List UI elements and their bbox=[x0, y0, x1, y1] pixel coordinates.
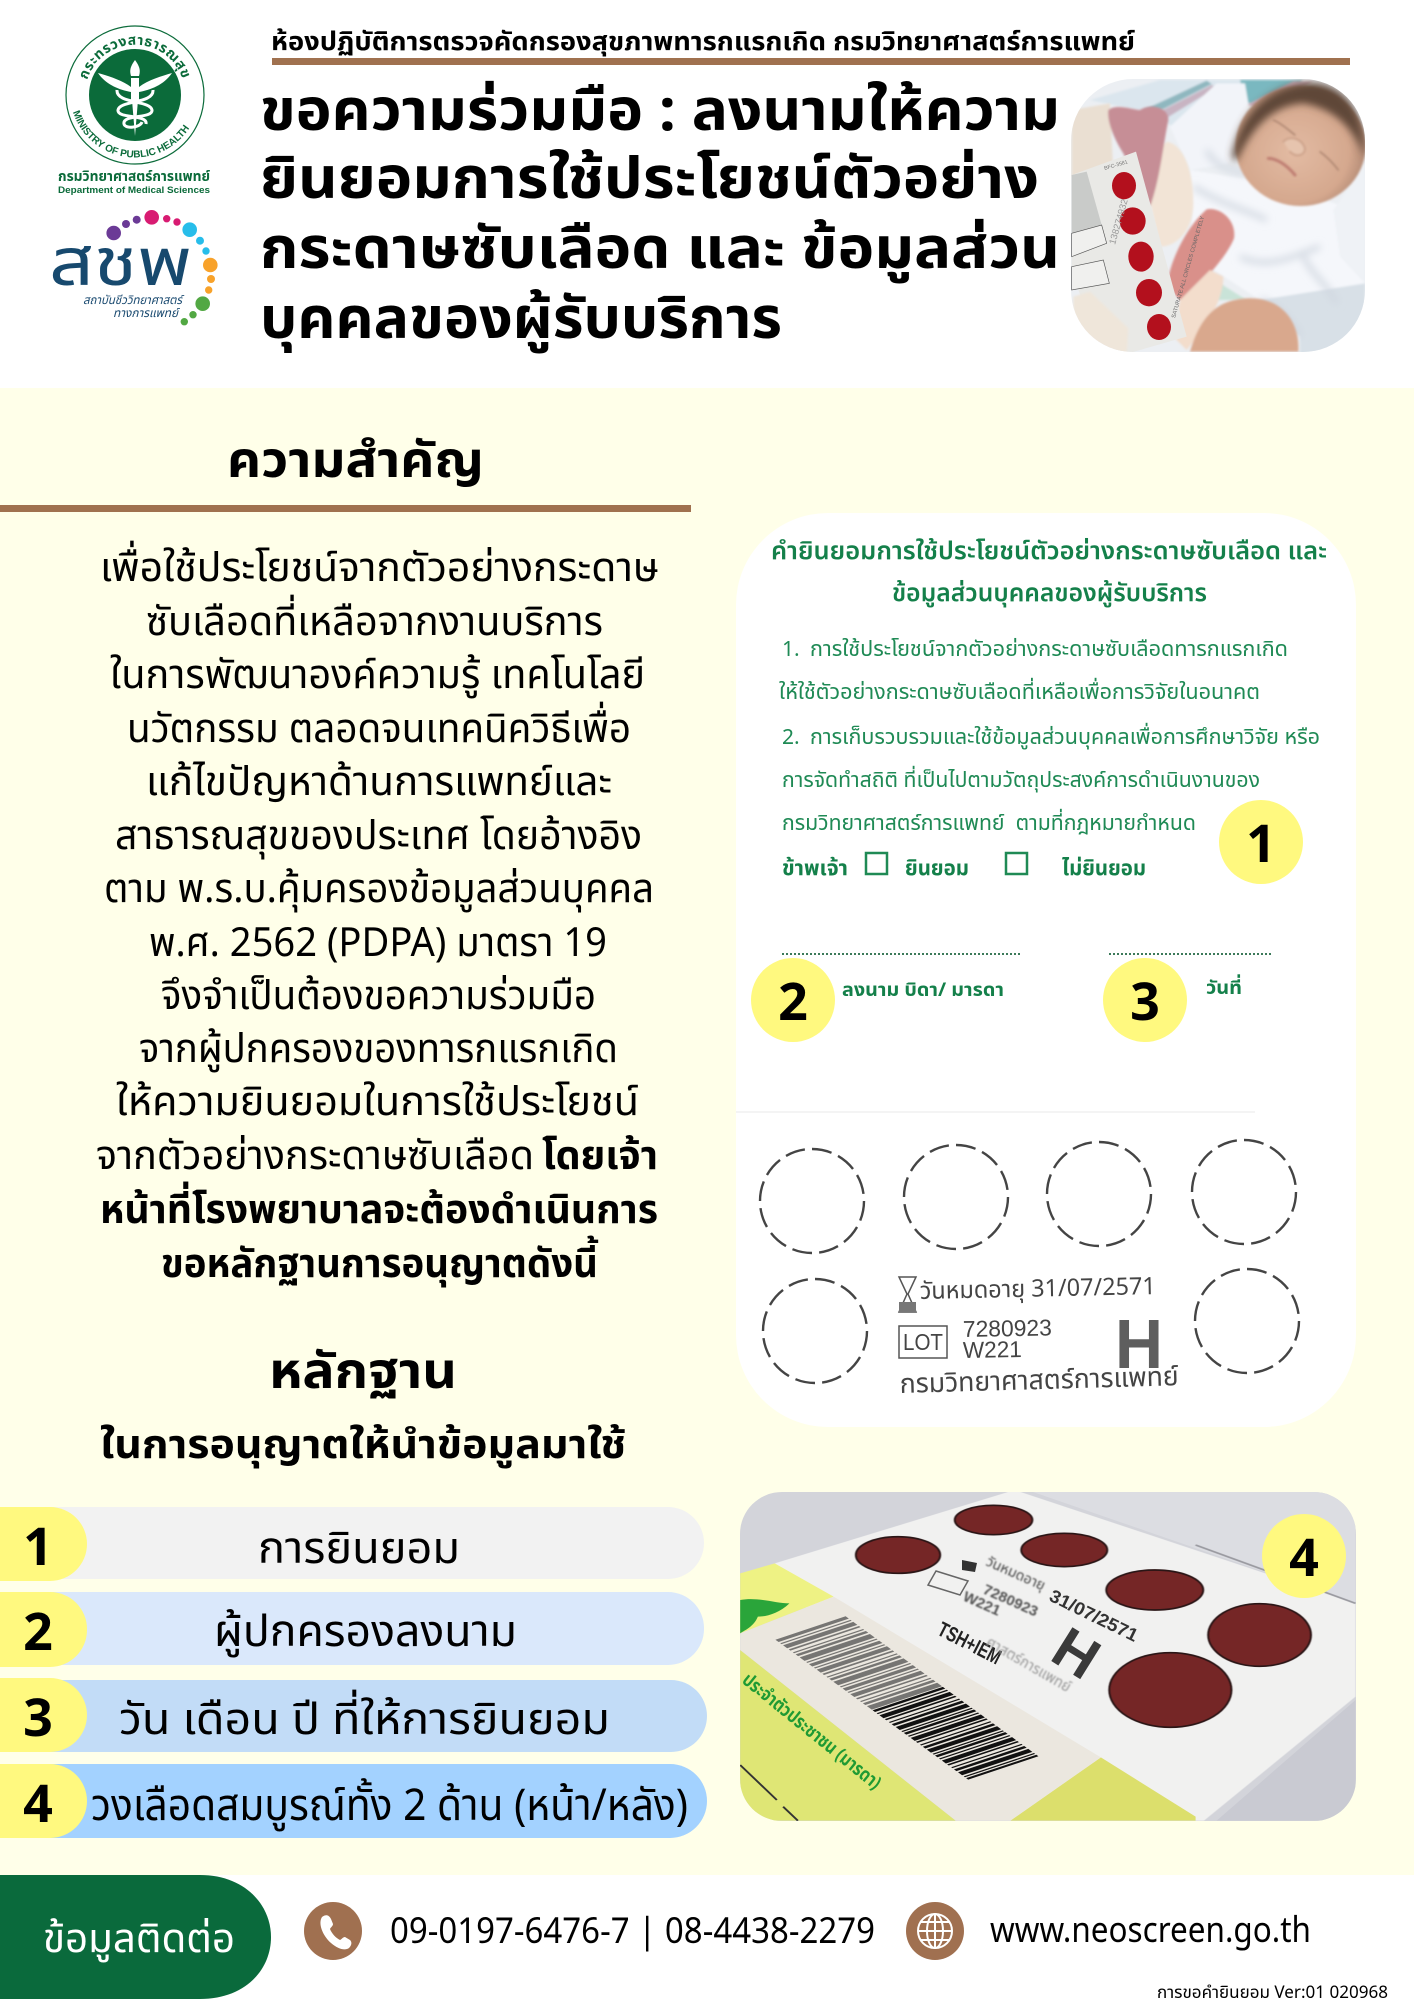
logo: Ministry of Public Health: MINISTRY OF PUBLIC HEALTH bbox=[73, 110, 190, 158]
badge 2: 2 bbox=[778, 966, 808, 1044]
form title: คำยินยอมการใช้ประโยชน์ตัวอย่างกระดาษซับเลือด และ bbox=[771, 533, 1327, 571]
consent checkboxes: ไม่ยินยอม bbox=[1062, 854, 1146, 885]
list item 1: 1 bbox=[23, 1511, 53, 1589]
logo: institute of biological sciences: ทางการแพทย์ bbox=[113, 305, 180, 323]
phone numbers: 09-0197-6476-7 | 08-4438-2279 bbox=[390, 1906, 875, 1960]
title: กระดาษซับเลือด และ ข้อมูลส่วน bbox=[260, 207, 1060, 295]
title: ยินยอมการใช้ประโยชน์ตัวอย่าง bbox=[260, 137, 1039, 225]
form clauses: ให้ใช้ตัวอย่างกระดาษซับเลือดที่เหลือเพื่อการวิจัยในอนาคต bbox=[779, 677, 1260, 709]
card print: TSH+IEM bbox=[934, 1618, 1005, 1669]
body text block: จากตัวอย่างกระดาษซับเลือด bbox=[96, 1127, 534, 1187]
list item 1: การยินยอม bbox=[258, 1516, 460, 1583]
consent checkboxes bbox=[782, 853, 1146, 885]
body text block: จากผู้ปกครองของทารกแรกเกิด bbox=[139, 1020, 618, 1080]
body text block: โดยเจ้า bbox=[542, 1127, 658, 1187]
lot number: LOT bbox=[903, 1329, 943, 1355]
page background bbox=[0, 388, 1414, 1875]
badge 3 bbox=[1103, 958, 1187, 1044]
photo: newborn heel-prick blood spot card: SATURATE ALL CIRCLES COMPLETELY bbox=[1171, 215, 1206, 319]
card print: W221 bbox=[960, 1588, 1003, 1620]
card small print: BFC-3581 bbox=[1104, 159, 1129, 172]
fold line bbox=[736, 1111, 1255, 1113]
list item 3: 3 bbox=[23, 1682, 53, 1760]
form department name: กรมวิทยาศาสตร์การแพทย์ bbox=[899, 1357, 1179, 1406]
list item 3 bbox=[0, 1678, 707, 1760]
expiry date: วันหมดอายุ 31/07/2571 bbox=[919, 1269, 1156, 1310]
photo: newborn heel-prick blood spot card bbox=[1070, 78, 1367, 353]
card print: ศาสตร์การแพทย์ bbox=[982, 1631, 1075, 1699]
form clauses: กรมวิทยาศาสตร์การแพทย์ ตามที่กฎหมายกำหนด bbox=[782, 808, 1196, 840]
photo: newborn heel-prick blood spot card: 138274932 bbox=[1107, 198, 1130, 246]
logo: institute of biological sciences bbox=[49, 210, 218, 325]
list item 2 bbox=[0, 1592, 704, 1674]
list item 4: วงเลือดสมบูรณ์ทั้ง 2 ด้าน (หน้า/หลัง) bbox=[91, 1773, 688, 1840]
icon: globe bbox=[906, 1902, 964, 1960]
dashed blood spot circles bbox=[760, 1140, 1299, 1383]
department name Thai: กรมวิทยาศาสตร์การแพทย์ bbox=[58, 167, 210, 188]
body text block: นวัตกรรม ตลอดจนเทคนิควิธีเพื่อ bbox=[127, 700, 631, 760]
logo: Ministry of Public Health: กระทรวงสาธารณสุข bbox=[80, 36, 190, 80]
heading: importance: ความสำคัญ bbox=[227, 424, 484, 500]
card print: H bbox=[1041, 1615, 1111, 1692]
body text block: หน้าที่โรงพยาบาลจะต้องดำเนินการ bbox=[100, 1181, 658, 1241]
panel: consent form bbox=[736, 513, 1356, 1427]
heading: evidence: หลักฐาน bbox=[269, 1335, 457, 1411]
card print bbox=[735, 1552, 1141, 1797]
title: ขอความร่วมมือ : ลงนามให้ความ bbox=[260, 69, 1060, 157]
icon: phone bbox=[304, 1902, 362, 1960]
body text block: ในการพัฒนาองค์ความรู้ เทคโนโลยี bbox=[110, 646, 645, 706]
body text block: เพื่อใช้ประโยชน์จากตัวอย่างกระดาษ bbox=[100, 539, 659, 599]
signature label: ลงนาม บิดา/ มารดา bbox=[842, 976, 1004, 1005]
consent checkboxes: ข้าพเจ้า bbox=[782, 854, 848, 885]
title bbox=[260, 69, 1060, 365]
photo: used blood spot card with barcode bbox=[735, 1490, 1356, 1821]
badge 1: 1 bbox=[1246, 808, 1276, 886]
card print: วันหมดอายุ bbox=[982, 1552, 1048, 1597]
form clauses bbox=[779, 635, 1320, 840]
list item 1 bbox=[0, 1507, 704, 1589]
header organisation line: ห้องปฏิบัติการตรวจคัดกรองสุขภาพทารกแรกเกิด กรมวิทยาศาสตร์การแพทย์ bbox=[271, 22, 1135, 62]
body text block: สาธารณสุขของประเทศ โดยอ้างอิง bbox=[115, 807, 642, 867]
card print: ประจำตัวประชาชน (มารดา) bbox=[735, 1666, 887, 1797]
logo wordmark: สชพ bbox=[49, 215, 192, 315]
title: บุคคลของผู้รับบริการ bbox=[260, 277, 782, 365]
list item 4: 4 bbox=[23, 1768, 53, 1846]
form clauses: 2. bbox=[782, 723, 800, 754]
body text block: ตาม พ.ร.บ.คุ้มครองข้อมูลส่วนบุคคล bbox=[104, 860, 654, 920]
body text block bbox=[96, 539, 659, 1295]
letter H mark: H bbox=[1115, 1305, 1163, 1383]
badge 2 bbox=[751, 958, 835, 1044]
subheading: evidence: ในการอนุญาตให้นำข้อมูลมาใช้ bbox=[100, 1416, 626, 1476]
signature dotted lines bbox=[782, 953, 1271, 955]
barcode bbox=[810, 1628, 1003, 1768]
body text block: จึงจำเป็นต้องขอความร่วมมือ bbox=[161, 967, 596, 1027]
body text block: ให้ความยินยอมในการใช้ประโยชน์ bbox=[116, 1073, 639, 1133]
form clauses: การใช้ประโยชน์จากตัวอย่างกระดาษซับเลือดทารกแรกเกิด bbox=[810, 635, 1288, 666]
badge 1 bbox=[1219, 800, 1303, 886]
list item 3: วัน เดือน ปี ที่ให้การยินยอม bbox=[119, 1687, 610, 1754]
list item 2: 2 bbox=[23, 1596, 53, 1674]
heading rule bbox=[0, 505, 691, 512]
date label: วันที่ bbox=[1206, 974, 1242, 1003]
contact pill: ข้อมูลติดต่อ bbox=[43, 1910, 235, 1970]
institute name: สถาบันชีววิทยาศาสตร์ bbox=[83, 292, 184, 310]
badge 4 bbox=[1262, 1514, 1346, 1600]
badge 4: 4 bbox=[1289, 1522, 1319, 1600]
body text block: พ.ศ. 2562 (PDPA) มาตรา 19 bbox=[149, 914, 607, 974]
form clauses: การจัดทำสถิติ ที่เป็นไปตามวัตถุประสงค์การดำเนินงานของ bbox=[782, 765, 1260, 797]
header rule bbox=[272, 58, 1350, 65]
body text block: ซับเลือดที่เหลือจากงานบริการ bbox=[146, 593, 603, 653]
badge 3: 3 bbox=[1130, 966, 1160, 1044]
list item 4 bbox=[0, 1764, 707, 1846]
lot number bbox=[899, 1314, 1052, 1363]
contact pill bbox=[0, 1875, 271, 1999]
body text block: แก้ไขปัญหาด้านการแพทย์และ bbox=[146, 753, 612, 813]
card print: 7280923 bbox=[980, 1581, 1041, 1620]
list item 2: ผู้ปกครองลงนาม bbox=[214, 1599, 517, 1666]
department name English: Department of Medical Sciences bbox=[58, 185, 210, 195]
panel: consent form: ข้อมูลส่วนบุคคลของผู้รับบริการ bbox=[892, 575, 1207, 613]
website: www.neoscreen.go.th bbox=[990, 1905, 1311, 1959]
body text block: ขอหลักฐานการอนุญาตดังนี้ bbox=[161, 1235, 599, 1295]
lot number: 7280923 bbox=[963, 1314, 1052, 1342]
form clauses: 1. bbox=[782, 635, 800, 666]
consent checkboxes: ยินยอม bbox=[905, 854, 969, 885]
form clauses: การเก็บรวบรวมและใช้ข้อมูลส่วนบุคคลเพื่อการศึกษาวิจัย หรือ bbox=[810, 722, 1320, 754]
lot number: W221 bbox=[963, 1336, 1022, 1363]
card print: 31/07/2571 bbox=[1046, 1586, 1141, 1646]
logo: Ministry of Public Health bbox=[58, 25, 210, 195]
